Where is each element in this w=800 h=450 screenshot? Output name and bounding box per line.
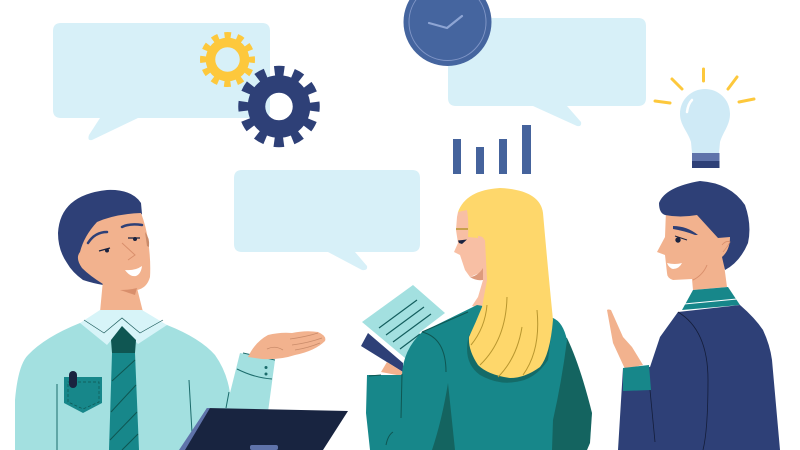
hand xyxy=(248,331,325,359)
jacket xyxy=(618,305,780,450)
hand xyxy=(381,362,403,376)
collar stripe xyxy=(684,299,737,304)
shirt pocket with pen xyxy=(64,371,102,413)
collar xyxy=(80,310,167,345)
speech bubble: centre xyxy=(234,170,420,270)
icon: wall clock xyxy=(404,0,492,66)
hair xyxy=(458,188,553,378)
person: man in navy jacket xyxy=(607,181,780,450)
facial features xyxy=(667,226,730,280)
hair xyxy=(58,190,142,285)
speech bubble: top left xyxy=(53,23,270,140)
tie xyxy=(109,326,139,450)
icon: light bulb xyxy=(655,69,754,168)
jacket shadow side xyxy=(545,335,592,450)
hair shadow on jacket xyxy=(467,310,553,383)
collar xyxy=(682,287,740,310)
bar chart icon xyxy=(453,125,531,174)
hair xyxy=(659,181,749,270)
face xyxy=(78,213,150,291)
inner sleeve shadow xyxy=(432,383,455,450)
document and book xyxy=(361,285,445,372)
neck xyxy=(100,280,143,312)
ear xyxy=(478,236,485,250)
cuff xyxy=(623,365,651,391)
shirt xyxy=(15,323,275,450)
eye and brow xyxy=(456,228,468,230)
hand raised xyxy=(607,310,643,369)
hair strands xyxy=(471,297,538,377)
speech bubble: top right xyxy=(448,18,646,126)
jacket xyxy=(366,305,567,450)
icon: yellow gear xyxy=(203,35,252,84)
person: man in light shirt xyxy=(15,190,348,450)
person: blonde woman in teal jacket xyxy=(361,188,592,450)
eye xyxy=(458,240,467,244)
facial features xyxy=(88,224,149,295)
chin shadow xyxy=(470,268,483,280)
neck and face xyxy=(454,209,495,310)
shirt lines xyxy=(57,353,275,450)
jacket seams xyxy=(650,312,708,450)
laptop xyxy=(179,408,348,450)
cuff buttons xyxy=(264,368,268,374)
jacket lines xyxy=(369,312,468,445)
neck and face xyxy=(657,205,733,290)
icon: navy gear xyxy=(244,71,314,142)
